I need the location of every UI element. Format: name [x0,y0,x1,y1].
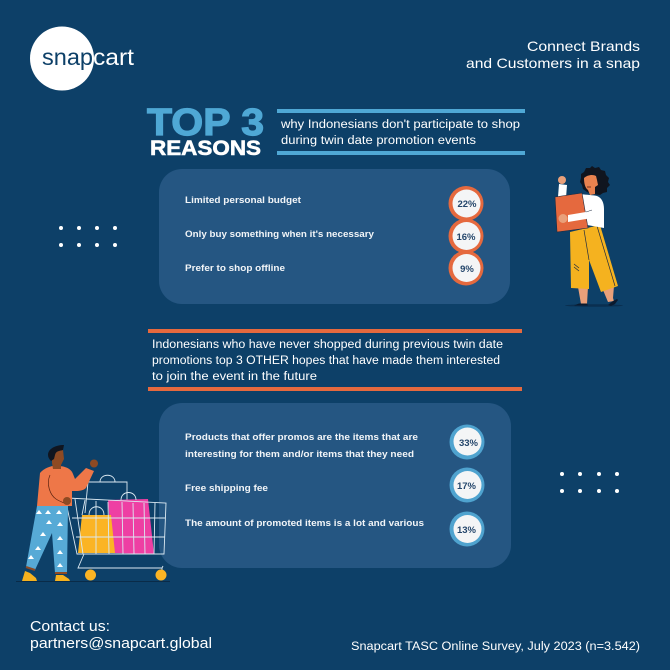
face [584,175,598,195]
illustration: man with shopping cart [16,445,170,582]
decorative dots: left [59,226,117,247]
reason 2 [185,218,484,254]
hope 2: 17% [457,481,477,492]
trousers [570,225,618,292]
title: top 3 reasons: TOP 3 [147,102,264,144]
title: top 3 reasons: REASONS [150,137,261,160]
source note: Snapcart TASC Online Survey, July 2023 (n=3.542) [351,641,640,653]
shirt [581,194,604,228]
subtitle: why Indonesians do not participate: during twin date promotion events [281,135,476,147]
tagline [466,38,640,71]
hope 1: interesting for them and/or items that they need [185,449,414,460]
cart [67,498,166,571]
divider heading: never shopped hopes: promotions top 3 OTHER hopes that have made them interested [152,355,500,367]
panel: reasons for not participating [159,169,510,304]
hair [580,166,610,195]
legs edge [26,567,67,573]
hope 1 [185,424,484,460]
hope 3 [185,512,484,546]
reason 3: Prefer to shop offline [185,263,285,274]
subtitle: why Indonesians do not participate [277,109,525,155]
tagline: Connect Brands [527,38,640,54]
hope 3: The amount of promoted items is a lot and various [185,518,424,529]
reason 1: 22% [457,199,477,210]
pink bag [108,499,154,554]
logo: snapcart: cart [93,44,134,70]
front arm [568,201,603,222]
contact us: partners@snapcart.global [30,635,212,652]
wheels [85,570,96,580]
yellow bag [78,515,115,553]
head [52,450,64,469]
reason 1 [185,186,484,221]
title: top 3 reasons [147,102,264,160]
tagline: and Customers in a snap [466,55,640,71]
decorative dots: right [560,472,619,493]
hope 2 [185,468,484,502]
hope 1: Products that offer promos are the items that are [185,432,418,443]
legs and feet [578,286,614,304]
reason 2: Only buy something when it's necessary [185,229,375,240]
hope 2: Free shipping fee [185,483,268,494]
shoes [22,571,70,581]
box [555,193,588,232]
hope 3: 13% [457,525,477,536]
subtitle: why Indonesians do not participate: why Indonesians don't participate to shop [280,119,520,131]
divider heading: never shopped hopes: to join the event in the future [152,371,317,383]
trousers [26,506,68,573]
raised hand [90,460,98,468]
logo: snapcart: snap [42,44,93,70]
illustration: woman holding box [555,166,623,307]
hand on cart [63,497,71,505]
reason 1: Limited personal budget [185,195,302,206]
hope 1: 33% [459,438,479,449]
contact us [30,618,212,652]
hair [48,445,64,461]
reason 3 [185,250,484,286]
reason 2: 16% [456,232,476,243]
contact us: Contact us: [30,618,110,635]
logo: snapcart [30,26,134,90]
back bag [85,475,127,513]
reason 3: 9% [460,264,474,275]
raised arm [558,184,567,198]
divider heading: never shopped hopes [148,329,522,391]
panel: future hopes [159,403,511,568]
divider heading: never shopped hopes: Indonesians who have never shopped during previous twin date [152,339,503,351]
shirt [37,466,94,506]
